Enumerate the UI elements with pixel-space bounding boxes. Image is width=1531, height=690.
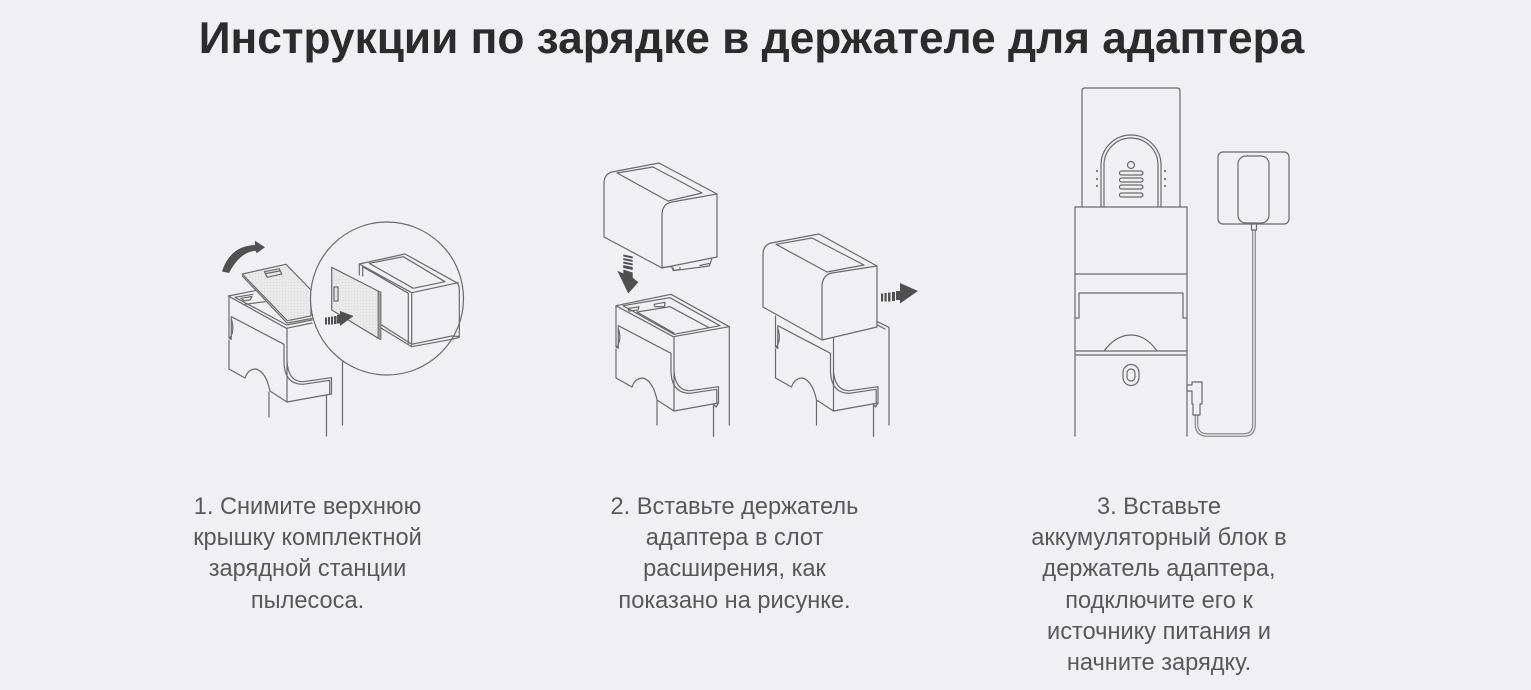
icon: curved arrow	[222, 241, 265, 273]
cable inner	[1196, 230, 1254, 435]
battery contact circle	[1128, 162, 1134, 168]
adapter holder arch	[1101, 135, 1161, 207]
power adapter	[1238, 156, 1269, 223]
step 3 text: аккумуляторный блок в	[1031, 525, 1287, 551]
icon: insert arrow	[325, 311, 354, 326]
battery pack card	[1082, 88, 1180, 207]
charging station base	[228, 291, 342, 436]
magnifier circle	[310, 222, 464, 375]
charging station front	[1075, 207, 1187, 436]
lid	[242, 264, 311, 321]
step 2 text: показано на рисунке.	[618, 588, 851, 614]
step 3 text: 3. Вставьте	[1097, 494, 1221, 520]
step 3 text: начните зарядку.	[1067, 650, 1251, 676]
step 1 text: пылесоса.	[251, 588, 364, 614]
contact bars	[1120, 171, 1143, 197]
step 3 text: держатель адаптера,	[1042, 556, 1276, 582]
right-angle plug	[1187, 382, 1202, 415]
card slot	[334, 287, 338, 301]
step 2 text	[611, 494, 858, 614]
illustration: step 3 charge	[1075, 88, 1289, 436]
step 2 text: расширения, как	[643, 556, 826, 582]
battery upper	[604, 163, 717, 271]
icon: down arrow	[617, 254, 638, 294]
step 3 text: подключите его к	[1065, 588, 1253, 614]
adapter card	[332, 267, 380, 339]
title: Инструкции по зарядке в держателе для адаптера	[199, 14, 1304, 63]
indicator dots	[1096, 170, 1166, 187]
step 1 text: крышку комплектной	[193, 525, 422, 551]
step 3 text	[1031, 494, 1287, 676]
icon: right arrow	[881, 283, 918, 304]
step 1 text: 1. Снимите верхнюю	[194, 494, 421, 520]
station base right	[776, 316, 889, 436]
lid thickness	[242, 276, 312, 323]
adapter holder box	[359, 254, 459, 347]
adapter cable	[1196, 230, 1254, 435]
illustration: step 2 insert holder	[604, 163, 918, 436]
step 2 text: 2. Вставьте держатель	[611, 494, 858, 520]
illustration: step 1 remove lid	[222, 222, 464, 436]
step 3 text: источнику питания и	[1047, 619, 1271, 645]
step 2 text: адаптера в слот	[646, 525, 823, 551]
wall socket plate	[1218, 152, 1289, 224]
station base left	[616, 294, 729, 436]
step 1 text	[193, 494, 422, 614]
card edge	[378, 292, 381, 340]
station button	[1123, 364, 1139, 386]
lid slot	[264, 269, 282, 277]
cable strain relief	[1252, 224, 1256, 230]
step 1 text: зарядной станции	[209, 556, 406, 582]
battery inserted	[763, 234, 877, 340]
